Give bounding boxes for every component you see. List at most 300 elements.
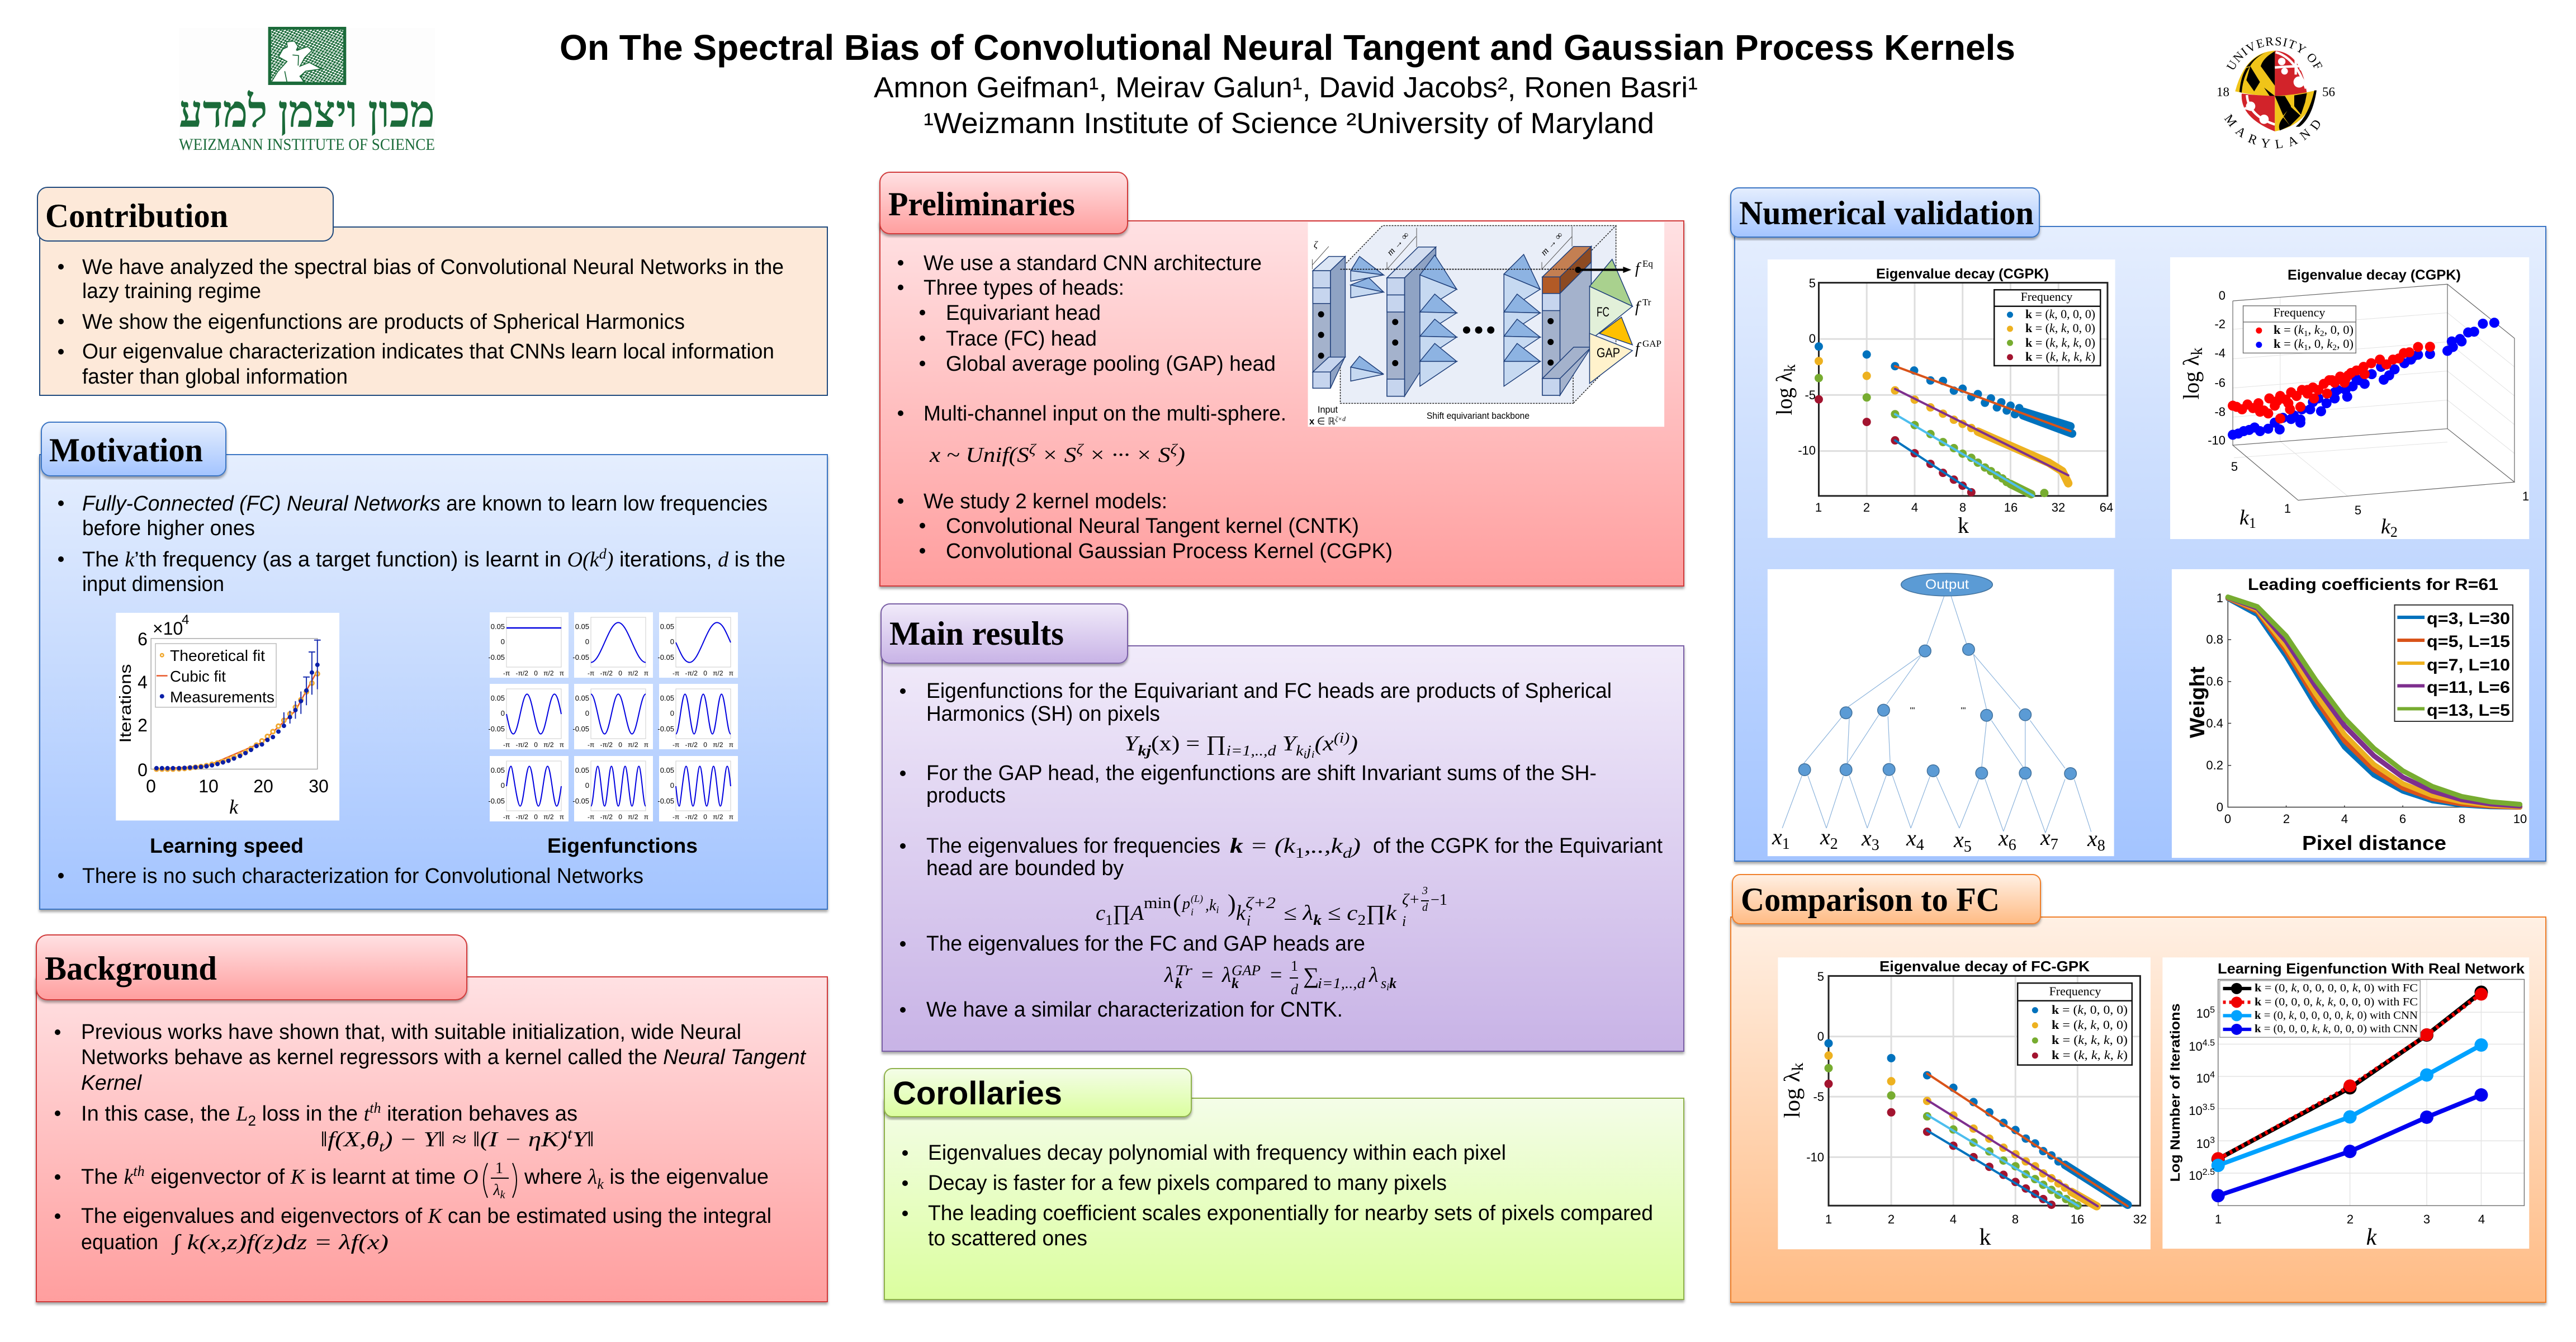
bullet list: Our eigenvalue characterization indicates that CNNs learn local information [82,340,774,363]
bullet list: iteration behaves as [381,1102,577,1126]
axis ticks: 4 [2210,1070,2215,1080]
formula: eigenvalue bounds: −1 [1431,891,1447,909]
bullet list: ζ [1171,441,1178,457]
logo: University of Maryland seal: 56 [2322,85,2335,99]
panel: contribution [37,187,827,395]
legend: k = (k, 0, 0, 0) [2052,1003,2128,1017]
axis labels [2179,348,2398,540]
bullet list: × S [1036,443,1076,467]
plot: k=2 cosine: 0 [585,709,589,717]
plot: k=1 sine: 0.05 [660,622,674,631]
axis ticks: -5 [1813,1090,1824,1104]
plot: k=4 cosine: 0 [585,781,589,790]
legend: k = (k [2274,323,2304,337]
bullet list: th [370,1100,381,1116]
formula: eigenfunction product: i=1,..,d [1227,743,1277,759]
axis ticks: 2.5 [2203,1168,2215,1177]
chart title: Eigenvalue decay (CGPK) [2288,267,2461,283]
plot: k=1 sine: -π -π/2 0 π/2 π [673,669,733,677]
node labels: x [1906,825,1916,850]
bullet list: loss in the [256,1102,364,1126]
axis ticks [1798,276,2113,514]
axis labels: 0 [146,776,156,796]
heading: corollaries: Corollaries [893,1075,1062,1112]
legend [170,647,274,706]
panel: numerical validation [1731,188,2546,861]
axis ticks: 2 [1888,1212,1895,1226]
bullet list: eigenvector of [145,1165,291,1189]
axis ticks [2208,289,2529,517]
bullet list: lazy training regime [82,280,261,303]
legend: k [2327,337,2333,351]
icon: tree emblem [269,28,345,84]
axis ticks: 0 [1817,1029,1824,1043]
axis ticks: 1 [2215,1212,2222,1226]
plot: k=3 sine [488,756,569,821]
plot: k=3 sine: 0.05 [491,766,505,774]
bullet list: d [1343,845,1352,861]
formula: FC and GAP eigenvalues [1164,958,1396,998]
formula: eigenvalue bounds: ∏ [1112,901,1130,925]
bullet list: We use a standard CNN architecture [924,252,1262,275]
plot: k=2 sine: 0 [501,709,505,717]
plot: k=1 cosine: 0 [585,637,589,646]
axis labels: k [2239,506,2249,530]
diagram: CNN architecture [1308,222,1664,427]
y axis label: k [1782,365,1799,372]
heading: motivation [41,422,226,476]
node labels: 7 [2051,836,2058,853]
panel: background [36,935,827,1302]
bullet list: t [379,1138,385,1155]
bullet list: The eigenvalues for frequencies [926,834,1220,858]
axis ticks: 5 [2231,460,2238,474]
bullet list: ζ [1029,441,1036,457]
bullet list: Networks behave as kernel regressors with a kernel called the Neural Tangent [81,1046,806,1069]
axis labels: ×10 [153,618,183,639]
logo: University of Maryland seal [2217,37,2335,149]
formula: eigenfunction product: j [1305,743,1311,759]
axis ticks: 4 [1911,500,1918,514]
axis ticks: 4 [1950,1212,1957,1226]
axis ticks: -10 [2208,433,2225,447]
plot: k=2 cosine: -0.05 [572,725,589,733]
plot: k=1 cosine: -0.05 [572,653,589,661]
legend: 1 [2304,343,2308,352]
legend: , 0, 0) [2324,323,2354,337]
legend: k = (0, k, 0, 0, 0, 0, k, 0) with FC [2255,982,2418,994]
logo: Weizmann Institute of Science [179,28,435,154]
axis ticks: 2 [1863,500,1870,514]
axis ticks: 10 [2513,812,2527,826]
bullet list: Harmonics (SH) on pixels [926,702,1160,726]
legend: q=3, L=30 [2427,609,2510,628]
panel: corollaries [884,1069,1684,1300]
axis labels: k [229,796,239,818]
plot: k=3 cosine: -0.05 [657,725,674,733]
bullet list: × ··· × S [1083,443,1171,467]
formula: FC and GAP eigenvalues: GAP [1232,962,1261,979]
diagram labels: f [1635,340,1641,357]
formula: eigenfunction product: (i) [1334,730,1349,746]
formula: FC and GAP eigenvalues: i [1386,981,1389,993]
bullet list: ∫ k(x,z)f(z)dz = λf(x) [171,1231,389,1255]
axis ticks: 32 [2133,1212,2147,1226]
bullet list: d [599,546,607,562]
axis ticks: -10 [1798,443,1816,457]
axis ticks: 5 [1809,276,1816,290]
plot: k=4 sine: -0.05 [657,797,674,805]
legend: Frequency [2274,305,2325,319]
chart title: Eigenvalue decay of FC-GPK [1879,958,2090,975]
formula: eigenvalue bounds: k [1313,912,1322,928]
formula: eigenvalue bounds: i [1216,904,1219,915]
legend: q=5, L=15 [2427,632,2510,651]
bullet list: The leading coefficient scales exponentially for nearby sets of pixels compared [928,1202,1653,1225]
plot: k=0: 0.05 [491,622,505,631]
formula: eigenfunction product: (x) = ∏ [1151,732,1227,755]
bullet list: ) [605,548,613,571]
legend [2427,609,2510,720]
node labels: 8 [2097,837,2105,854]
plot: k=1 sine [657,612,738,678]
axis ticks: 3.5 [2203,1103,2215,1112]
axis labels: 1 [2249,515,2256,531]
formula: FC and GAP eigenvalues: k [1232,975,1239,991]
bullet list: ζ [1076,441,1084,457]
plot: k=1 cosine: -π -π/2 0 π/2 π [588,669,648,677]
diagram labels: f [1635,260,1641,277]
legend: k = (k, k, k, 0) [2025,336,2095,349]
legend: k = (0, 0, 0, k, k, 0, 0, 0) with CNN [2255,1023,2418,1035]
affiliations: ¹Weizmann Institute of Science ²University of Maryland [924,107,1654,140]
bullet list: Eigenvalues decay polynomial with frequency within each pixel [928,1141,1506,1165]
authors: Amnon Geifman¹, Meirav Galun¹, David Jacobs², Ronen Basri¹ [874,72,1698,104]
bullet list: Global average pooling (GAP) head [946,352,1276,376]
logo: Weizmann Institute of Science: WEIZMANN INSTITUTE OF SCIENCE [179,135,435,154]
plot: k=2 sine: -π -π/2 0 π/2 π [503,741,564,749]
formula: eigenfunction product: i [1311,749,1315,760]
axis labels: 20 [253,776,273,796]
axis ticks: 10 [2196,1007,2210,1020]
heading: numerical validation: Numerical validation [1739,195,2034,231]
icon: Maryland flag globe [2235,51,2317,131]
axis ticks: 2 [2283,812,2290,826]
plot: k=1 sine: 0 [670,637,674,646]
chart: eigenfunctions grid [488,612,738,821]
bullet list: The k’th frequency (as a target function) is learnt in O(k [82,548,599,571]
formula: O(1/lambda_k): O [463,1165,478,1189]
bullet list: head are bounded by [926,857,1124,880]
logo: University of Maryland seal: MARYLAND [2224,114,2320,149]
logo: University of Maryland seal: 18 [2217,85,2229,99]
axis labels: 2 [138,715,148,735]
plot: k=3 cosine [657,684,738,749]
diagram labels: x ∈ ℝ [1309,416,1336,427]
bullet list: ,..,k [1304,834,1343,858]
chart: eigenvalue decay CGPK 3D [2170,257,2529,540]
diagram labels: ζ×d [1335,415,1346,423]
axis labels: 4 [138,672,148,692]
plot: k=2 sine [488,684,569,749]
axis ticks: 10 [2189,1039,2203,1053]
diagram labels: m → ∞ [1538,230,1565,258]
plot: k=2 cosine: -π -π/2 0 π/2 π [588,741,648,749]
plot: k=4 sine: 0 [670,781,674,790]
plot: k=2 sine: -0.05 [488,725,505,733]
axis ticks [2189,1005,2485,1226]
axis ticks: 0.6 [2206,674,2223,688]
axis ticks: -2 [2214,317,2225,331]
plot: k=0: -π -π/2 0 π/2 π [503,669,564,677]
chart: learning speed [116,612,339,820]
axis ticks: 10 [2196,1137,2210,1151]
formula: eigenvalue bounds: ≤ λ [1284,901,1310,925]
diagram: hierarchical network tree [1768,569,2114,856]
diagram labels: GAP [1597,346,1620,361]
formula: eigenfunction product: kj [1138,743,1152,759]
caption: eigenfunctions: Eigenfunctions [547,834,698,857]
axis ticks: 16 [2071,1212,2084,1226]
heading: preliminaries: Preliminaries [888,186,1075,223]
formula: eigenvalue bounds: A [1130,901,1144,925]
y axis label: log λ [1779,1073,1805,1118]
diagram labels: Tr [1642,297,1651,308]
diagram labels [1309,230,1661,427]
axis ticks: 4 [2478,1212,2485,1226]
plot: k=2 cosine [572,684,653,749]
bullet list: The eigenvalues for the FC and GAP heads are [926,932,1365,956]
legend: q=11, L=6 [2427,678,2510,697]
axis ticks: 1 [2522,489,2529,503]
bullet list: ) [1176,443,1185,467]
formula: O(1/lambda_k): 1 [495,1160,503,1177]
formula: FC and GAP eigenvalues: = [1270,963,1282,987]
heading: background [36,935,467,1000]
bullet list [898,252,1393,563]
bullet list: before higher ones [82,517,255,540]
diagram labels: m → ∞ [1385,230,1411,258]
node labels: x [1820,824,1830,849]
plot: k=0: -0.05 [488,653,505,661]
bullet list: ) − Y‖ ≈ ‖(I − ηK) [382,1128,567,1151]
y axis label: Log Number of Iterations [2168,1003,2183,1182]
formula: eigenvalue bounds: k [1236,901,1246,925]
formula: eigenfunction product: (x [1315,732,1334,755]
axis ticks: 0.4 [2206,716,2223,730]
legend: q=7, L=10 [2427,656,2510,674]
legend: k = (0, k, 0, 0, 0, 0, k, 0) with CNN [2255,1009,2418,1022]
axis ticks: 0.2 [2206,758,2223,772]
formula: FC and GAP eigenvalues: 1 [1291,958,1298,974]
axis ticks: 0 [1809,332,1816,346]
node labels: x [1999,825,2009,850]
axis ticks: -8 [2214,405,2225,419]
bullet list: Decay is faster for a few pixels compared to many pixels [928,1171,1447,1195]
plot: k=1 sine: -0.05 [657,653,674,661]
formula: eigenfunction product: Y [1124,732,1136,755]
formula: FC and GAP eigenvalues: λ [1368,963,1378,987]
axis labels: Iterations [117,664,135,743]
axis ticks: 5 [2355,503,2361,517]
axis labels: 2 [2390,524,2398,540]
formula: eigenvalue bounds: ∏ [1366,901,1386,925]
x axis label: k [2366,1225,2378,1250]
plot: k=3 sine: 0 [501,781,505,790]
plot: k=4 sine: -π -π/2 0 π/2 π [673,813,733,821]
bullet list: Convolutional Neural Tangent kernel (CNTK) [946,514,1359,538]
legend: Theoretical fit [170,647,265,664]
plot: k=3 cosine: -π -π/2 0 π/2 π [673,741,733,749]
diagram labels: ζ [1314,239,1318,250]
axis ticks: 2 [2347,1212,2354,1226]
heading: comparison to FC [1732,875,2040,924]
axis ticks: 10 [2189,1169,2203,1183]
formula: eigenvalue bounds: ζ+ [1402,891,1420,909]
y axis label: Weight [2186,667,2209,738]
caption: learning speed: Learning speed [150,834,304,857]
axis labels: 6 [138,629,148,649]
node labels: ''' [1961,706,1966,716]
legend: Measurements [170,688,274,706]
axis labels: k [2381,515,2390,538]
chart: eigenvalue decay FC-GPK [1778,957,2151,1250]
bullet list: K is learnt at time [291,1165,455,1189]
bullet list: th [133,1163,145,1179]
legend: , [2308,323,2314,337]
bullet list: We have analyzed the spectral bias of Convolutional Neural Networks in the [82,256,784,279]
axis ticks: 1 [2217,591,2223,605]
plot: k=3 cosine: 0.05 [660,694,674,702]
legend [2049,984,2128,1062]
node labels [1772,577,2105,856]
axis ticks [1806,970,2147,1226]
plot: k=2 cosine: 0.05 [575,694,589,702]
bullet list: of the CGPK for the Equivariant [1373,834,1663,858]
formula: FC and GAP eigenvalues: Tr [1175,962,1193,979]
node labels: x [1862,825,1872,850]
bullet list: Previous works have shown that, with suitable initialization, wide Neural [81,1020,741,1044]
bullet list: to scattered ones [928,1227,1087,1250]
diagram labels: FC [1597,305,1609,320]
bullet list: Eigenfunctions for the Equivariant and FC heads are products of Spherical [926,679,1612,703]
formula: eigenvalue bounds: d [1422,901,1428,914]
plot: k=3 sine: -π -π/2 0 π/2 π [503,813,564,821]
heading: main results [881,604,1128,663]
axis labels: log λ [2179,355,2204,399]
bullet list: where λ [524,1165,597,1189]
legend: , 0, [2308,337,2327,351]
legend: Frequency [2049,984,2101,998]
plot: k=0: 0 [501,637,505,646]
bullet list: x ~ Unif(S [930,443,1017,467]
plot: k=4 cosine: -π -π/2 0 π/2 π [588,813,648,821]
legend: k = (0, 0, 0, k, k, 0, 0, 0) with FC [2255,996,2418,1008]
formula: FC and GAP eigenvalues: k [1175,975,1182,991]
formula: FC and GAP eigenvalues: i=1,..,d [1318,975,1366,991]
legend: k = (k, 0, 0, 0) [2025,307,2095,321]
formula: eigenfunction product: Y [1276,732,1299,755]
bullet list: faster than global information [82,365,348,389]
formula: FC and GAP eigenvalues: s [1381,975,1386,991]
legend: k = (k, k, k, k) [2025,349,2095,363]
axis labels [117,612,329,818]
bullet list: k [597,1176,604,1192]
bullet list [55,1020,806,1255]
formula: eigenvalue bounds: i [1247,913,1251,929]
heading: comparison to FC: Comparison to FC [1741,881,2000,918]
legend: k = (k [2274,337,2304,351]
logo: Weizmann Institute of Science: מכון ויצמן למדע [179,88,435,137]
bullet list: In this case, the L [81,1102,248,1126]
formula: eigenvalue bounds: ( [1173,890,1181,917]
legend: q=13, L=5 [2427,701,2510,720]
axis ticks: 1 [2284,502,2291,516]
formula: FC and GAP eigenvalues: d [1291,981,1299,998]
axis ticks: -6 [2214,376,2225,390]
bullet list: is the eigenvalue [604,1165,769,1189]
axis ticks: 0 [2217,800,2223,814]
legend: Frequency [2021,290,2072,304]
legend: k = (k, k, 0, 0) [2052,1018,2128,1032]
bullet list [58,492,785,888]
node labels: 1 [1782,835,1790,853]
bullet list: Kernel [81,1071,143,1095]
formula: FC and GAP eigenvalues: = [1201,963,1213,987]
legend: k [2314,323,2321,337]
plot: k=1 cosine: 0.05 [575,622,589,631]
legend [2021,290,2095,363]
legend: k = (k, k, k, k) [2052,1048,2128,1062]
formula: eigenvalue bounds: 3 [1422,885,1428,897]
axis ticks: 8 [1959,500,1966,514]
formula: eigenfunction product: i [1304,749,1306,760]
axis labels: 0 [138,760,148,780]
bullet list: We study 2 kernel models: [924,490,1167,513]
bullet list: ) [1351,834,1361,858]
formula: FC and GAP eigenvalues: k [1389,975,1396,991]
panel: comparison to FC [1731,875,2546,1302]
bullet list: t [567,1126,573,1142]
legend: k = (k, k, k, 0) [2052,1033,2128,1047]
heading: main results: Main results [889,615,1064,652]
formula: eigenvalue bounds: ζ+2 [1246,895,1276,912]
axis ticks: 4.5 [2203,1038,2215,1048]
axis ticks: 10 [2189,1104,2203,1118]
bullet list: iterations, d is the [619,548,785,571]
axis ticks: 8 [2459,812,2465,826]
axis ticks: 0 [2224,812,2231,826]
node labels: x [2040,825,2051,850]
plot: k=4 sine [657,756,738,821]
heading: contribution: Contribution [45,197,228,234]
bullet list [902,1141,1653,1250]
panel: preliminaries [880,172,1684,586]
bullet list: 1 [1295,845,1304,861]
bullet list: products [926,784,1006,807]
bullet list: We have a similar characterization for CNTK. [926,998,1343,1022]
node labels: x [1954,827,1964,852]
diagram labels: GAP [1642,338,1661,349]
axis ticks: 32 [2052,500,2065,514]
formula: eigenvalue bounds: 2 [1357,912,1366,928]
x axis label: k [1979,1225,1991,1250]
legend: 1 [2304,329,2308,338]
formula: eigenvalue bounds [1096,885,1447,929]
bullet list: 2 [248,1112,256,1129]
legend: 2 [2332,343,2337,352]
node labels: x [2087,826,2097,851]
